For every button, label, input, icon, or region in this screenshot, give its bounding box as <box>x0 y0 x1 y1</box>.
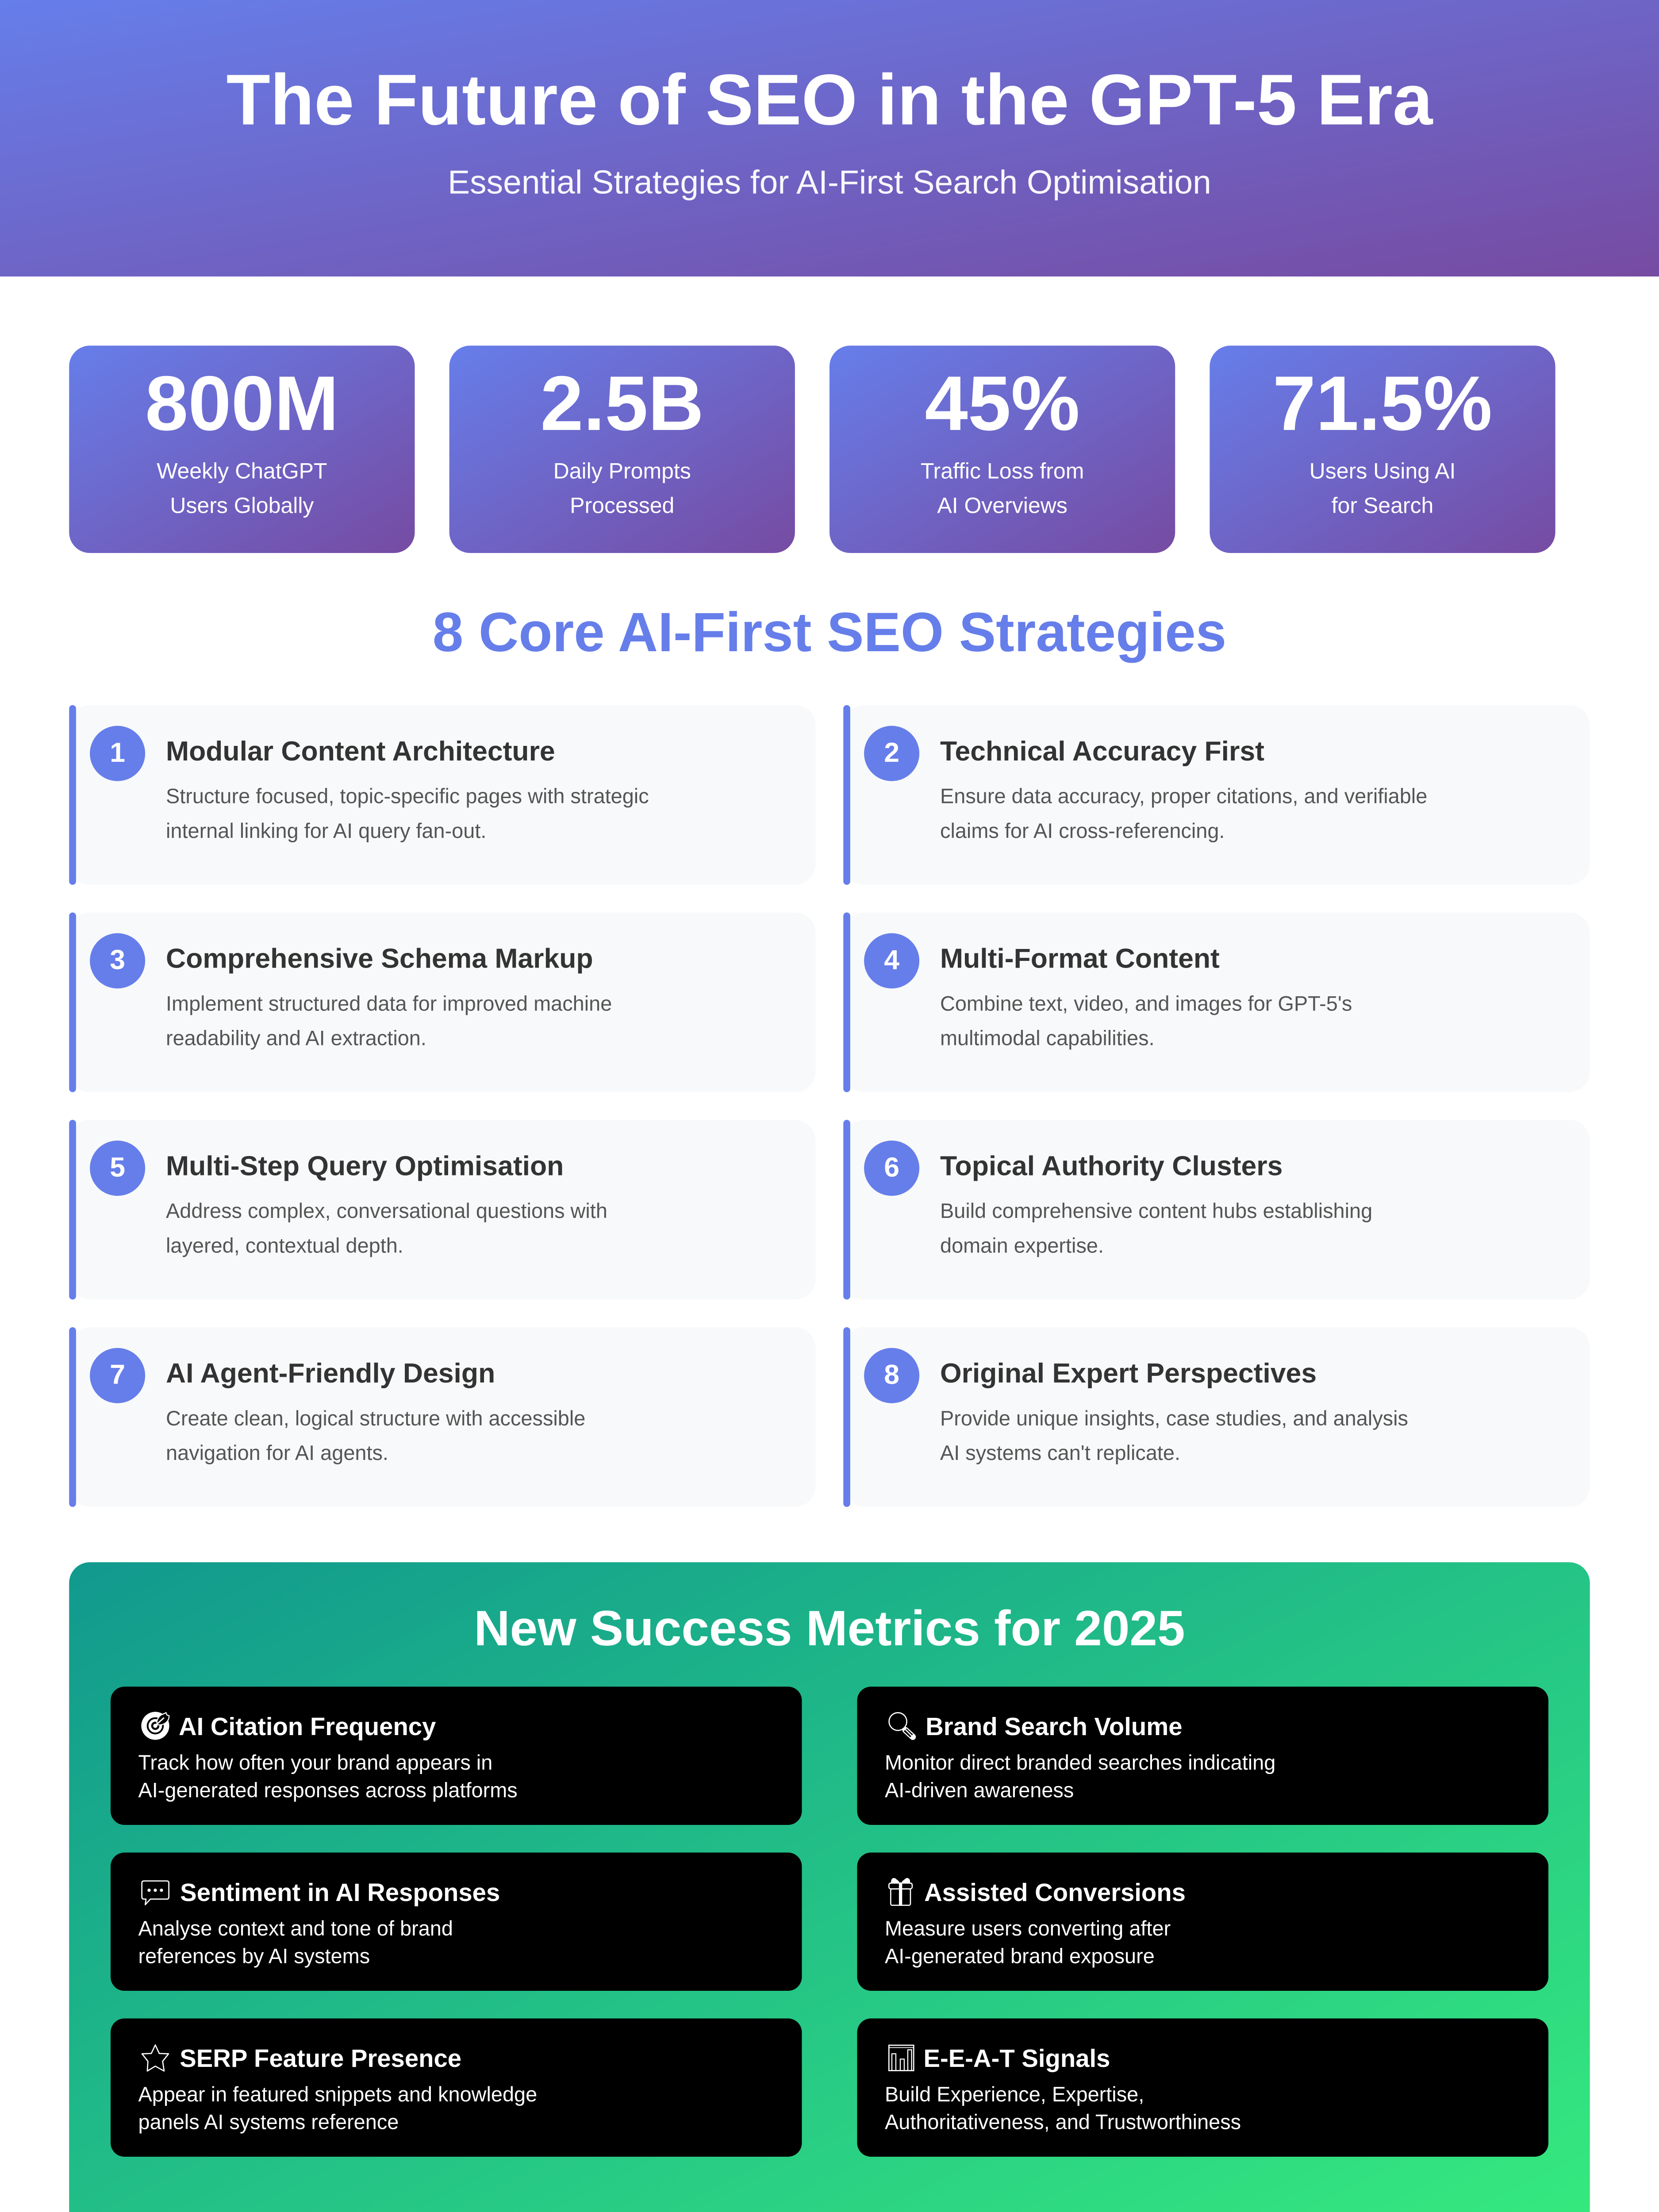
strategy card 7: Create clean, logical structure with accessible <box>166 1407 585 1431</box>
metric: SERP feature presence: SERP Feature Presence <box>180 2045 461 2072</box>
metric: brand search volume <box>857 1686 1548 1825</box>
strategy card 8: 8 <box>884 1360 899 1391</box>
stat card: 45%: AI Overviews <box>937 495 1068 518</box>
metric: E-E-A-T signals: E-E-A-T Signals <box>924 2045 1110 2072</box>
metric: sentiment: Sentiment in AI Responses <box>180 1879 500 1906</box>
strategy card 5: Multi-Step Query Optimisation <box>166 1152 564 1182</box>
metric: brand search volume: AI-driven awareness <box>885 1779 1074 1803</box>
strategy card 4: Combine text, video, and images for GPT-5's <box>940 993 1352 1016</box>
strategy card 5: layered, contextual depth. <box>166 1235 403 1258</box>
metric: AI citation frequency: AI Citation Frequency <box>179 1713 436 1740</box>
strategy card 7: 7 <box>110 1360 125 1391</box>
stat card: 71.5%: for Search <box>1332 495 1433 518</box>
strategy card 6 <box>843 1120 1590 1300</box>
metric: sentiment: Analyse context and tone of brand <box>138 1917 453 1941</box>
metric: E-E-A-T signals: Authoritativeness, and Trustworthiness <box>885 2111 1241 2135</box>
strategy card 2 <box>843 705 1590 885</box>
metric: sentiment: references by AI systems <box>138 1945 370 1969</box>
stat card: 2.5B <box>449 346 795 553</box>
strategy card 7: navigation for AI agents. <box>166 1442 388 1465</box>
icon: star <box>133 2039 186 2079</box>
strategy card 5 <box>69 1120 816 1300</box>
strategy card 4: 4 <box>884 946 899 976</box>
icon: magnifier <box>880 1708 933 1747</box>
strategy card 5: Address complex, conversational questions with <box>166 1200 607 1224</box>
stat card: 800M: Users Globally <box>170 495 314 518</box>
icon: speech bubble <box>133 1874 186 1913</box>
stat card: 800M <box>69 346 415 553</box>
metric: assisted conversions: Assisted Conversions <box>924 1879 1186 1906</box>
strategy card 8: AI systems can't replicate. <box>940 1442 1180 1465</box>
stat card: 45%: Traffic Loss from <box>921 461 1084 484</box>
title: The Future of SEO in the GPT-5 Era <box>227 60 1432 140</box>
strategy card 5: 5 <box>110 1153 125 1183</box>
metric: SERP feature presence: panels AI systems reference <box>138 2111 399 2135</box>
header banner <box>0 0 1659 276</box>
stat card: 800M: 800M <box>145 359 339 446</box>
strategy card 2: Technical Accuracy First <box>940 737 1264 767</box>
strategy card 6: Build comprehensive content hubs establishing <box>940 1200 1372 1224</box>
stat card: 71.5% <box>1210 346 1555 553</box>
strategy card 4 <box>843 912 1590 1092</box>
metric: E-E-A-T signals: Build Experience, Expertise, <box>885 2083 1144 2107</box>
strategy card 1: internal linking for AI query fan-out. <box>166 820 486 843</box>
strategy card 3: 3 <box>110 946 125 976</box>
strategy card 2: Ensure data accuracy, proper citations, and verifiable <box>940 785 1427 809</box>
metric: SERP feature presence: Appear in featured snippets and knowledge <box>138 2083 537 2107</box>
stat card: 71.5%: Users Using AI <box>1310 461 1455 484</box>
strategy card 8: Provide unique insights, case studies, and analysis <box>940 1407 1408 1431</box>
strategy card 8: Original Expert Perspectives <box>940 1359 1317 1390</box>
metric: assisted conversions: Measure users converting after <box>885 1917 1171 1941</box>
icon: target <box>133 1708 186 1747</box>
strategy card 6: domain expertise. <box>940 1235 1104 1258</box>
strategy card 4: multimodal capabilities. <box>940 1027 1155 1051</box>
icon: gift <box>880 1874 933 1913</box>
metric: AI citation frequency: AI-generated responses across platforms <box>138 1779 518 1803</box>
strategy card 6: Topical Authority Clusters <box>940 1152 1283 1182</box>
metric: brand search volume: Brand Search Volume <box>926 1713 1183 1740</box>
strategy card 1: Structure focused, topic-specific pages with strategic <box>166 785 649 809</box>
subtitle: Essential Strategies for AI-First Search Optimisation <box>448 164 1211 201</box>
strategy card 2: claims for AI cross-referencing. <box>940 820 1225 843</box>
strategy card 8 <box>843 1327 1590 1507</box>
strategy card 7 <box>69 1327 816 1507</box>
metric: assisted conversions: AI-generated brand exposure <box>885 1945 1155 1969</box>
strategy card 4: Multi-Format Content <box>940 944 1220 975</box>
strategy card 2: 2 <box>884 738 899 769</box>
metric: assisted conversions <box>857 1853 1548 1991</box>
metric: AI citation frequency <box>111 1686 802 1825</box>
metrics heading: New Success Metrics for 2025 <box>474 1600 1185 1656</box>
metric: brand search volume: Monitor direct branded searches indicating <box>885 1751 1275 1775</box>
strategy card 3: Comprehensive Schema Markup <box>166 944 593 975</box>
icon: bar chart <box>880 2039 933 2079</box>
stat card: 71.5%: 71.5% <box>1273 359 1492 446</box>
metric: AI citation frequency: Track how often your brand appears in <box>138 1751 492 1775</box>
stat card: 45% <box>830 346 1175 553</box>
panel: success metrics <box>69 1562 1590 2212</box>
metric: SERP feature presence <box>111 2018 802 2157</box>
stat card: 45%: 45% <box>925 359 1080 446</box>
strategy card 6: 6 <box>884 1153 899 1183</box>
strategy card 1: Modular Content Architecture <box>166 737 555 767</box>
panel: strategies grid <box>69 705 1590 1507</box>
strategy card 7: AI Agent-Friendly Design <box>166 1359 495 1390</box>
panel: key statistics <box>69 346 1555 553</box>
strategy card 3: Implement structured data for improved machine <box>166 993 612 1016</box>
strategy card 3: readability and AI extraction. <box>166 1027 426 1051</box>
section heading: strategies: 8 Core AI-First SEO Strategies <box>433 602 1226 663</box>
strategy card 1 <box>69 705 816 885</box>
stat card: 2.5B: Processed <box>570 495 674 518</box>
metric: E-E-A-T signals <box>857 2018 1548 2157</box>
stat card: 800M: Weekly ChatGPT <box>157 461 327 484</box>
metric: sentiment <box>111 1853 802 1991</box>
strategy card 1: 1 <box>110 738 125 769</box>
stat card: 2.5B: Daily Prompts <box>553 461 691 484</box>
stat card: 2.5B: 2.5B <box>540 359 704 446</box>
strategy card 3 <box>69 912 816 1092</box>
